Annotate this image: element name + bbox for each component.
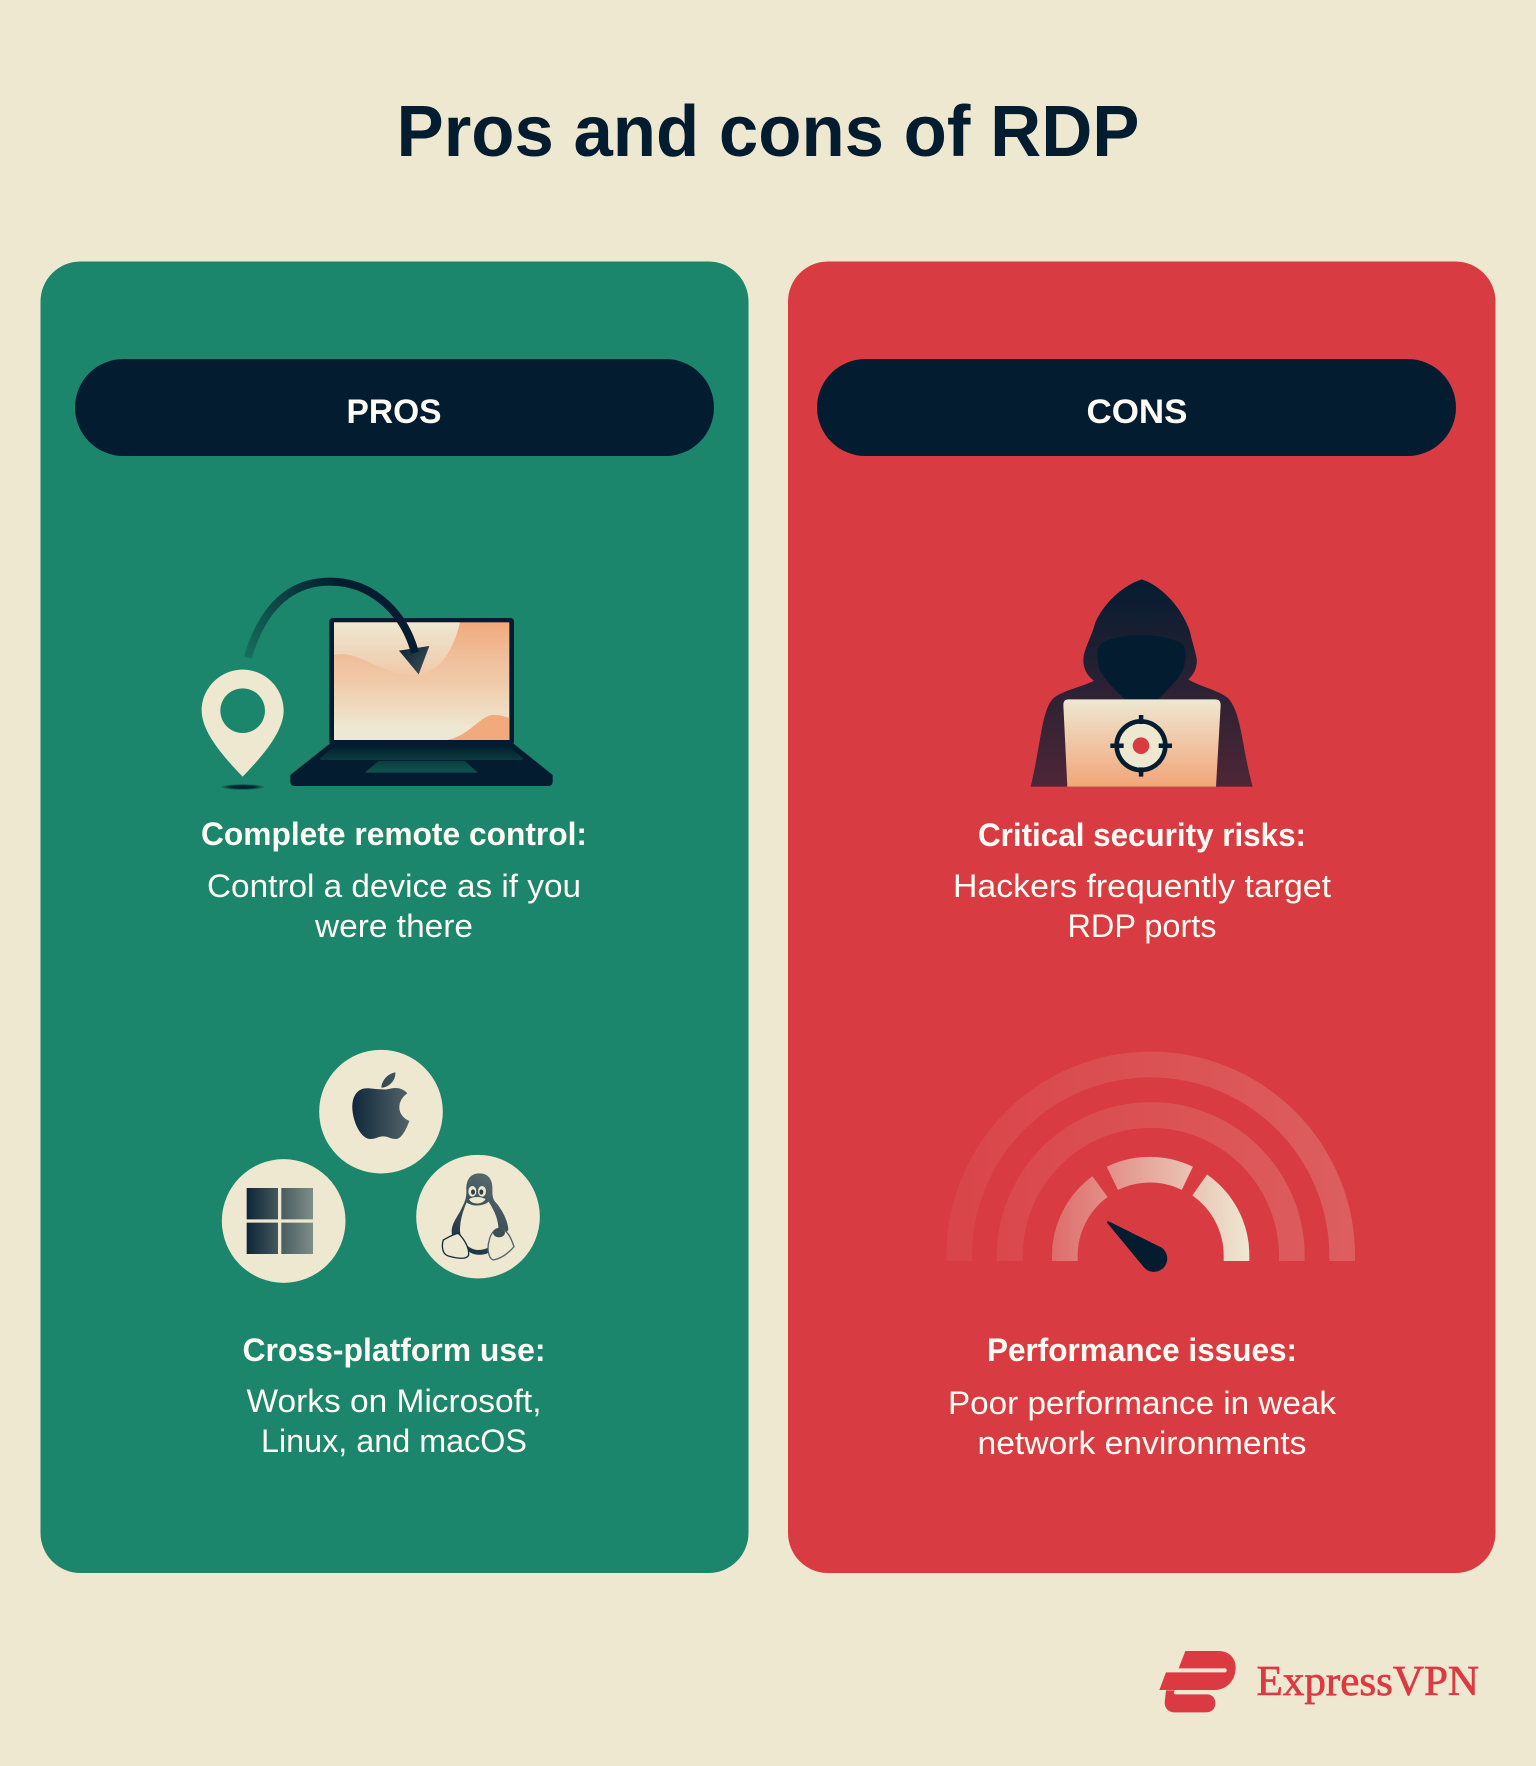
location pin	[202, 670, 284, 790]
icon: ExpressVPN mark	[1159, 1651, 1236, 1712]
text block: complete remote control: Complete remote control:	[201, 816, 587, 852]
text block: cross-platform use: Linux, and macOS	[261, 1423, 527, 1459]
icon: location pin with arrow to laptop	[202, 582, 553, 790]
cons header pill: CONS	[1086, 393, 1188, 431]
text block: performance issues: Poor performance in weak	[948, 1385, 1337, 1421]
panel background: pros	[40, 262, 748, 1573]
cons header pill	[817, 359, 1456, 456]
text block: performance issues	[948, 1332, 1337, 1461]
panel: pros	[40, 262, 748, 1573]
icon: windows	[222, 1159, 345, 1283]
gauge segments	[1065, 1170, 1236, 1261]
pros header pill	[75, 359, 714, 456]
laptop lid	[1063, 699, 1221, 787]
text block: complete remote control: Control a device as if you	[207, 868, 581, 904]
text block: critical security risks: RDP ports	[1068, 908, 1216, 944]
signal rings	[959, 1064, 1342, 1261]
icon: hooded hacker at laptop	[1031, 579, 1253, 787]
icons: operating systems	[222, 1050, 540, 1283]
text block: critical security risks: Hackers frequently target	[953, 868, 1331, 904]
text block: complete remote control: were there	[314, 908, 473, 944]
laptop base	[290, 744, 553, 786]
curved arrow	[248, 582, 429, 674]
icon: linux penguin	[416, 1155, 540, 1278]
text block: complete remote control	[201, 816, 587, 944]
title: Pros and cons of RDP	[396, 92, 1140, 172]
text block: performance issues: Performance issues:	[987, 1332, 1297, 1368]
wordmark: ExpressVPN	[1256, 1659, 1479, 1705]
panel: cons	[788, 262, 1496, 1573]
text block: critical security risks: Critical security risks:	[978, 817, 1306, 853]
icon: speedometer gauge	[959, 1064, 1342, 1272]
gauge needle	[1107, 1221, 1167, 1272]
text block: cross-platform use	[242, 1332, 546, 1459]
text block: critical security risks	[953, 817, 1331, 944]
text block: cross-platform use: Cross-platform use:	[242, 1332, 546, 1368]
icon: apple	[319, 1050, 443, 1173]
hooded figure	[1031, 579, 1253, 787]
crosshair target	[1110, 715, 1172, 777]
panel background: cons	[788, 262, 1496, 1573]
laptop screen	[329, 618, 514, 745]
logo: ExpressVPN	[1159, 1651, 1479, 1712]
text block: cross-platform use: Works on Microsoft,	[246, 1383, 542, 1419]
text block: performance issues: network environments	[978, 1425, 1306, 1461]
pros header pill: PROS	[346, 393, 442, 431]
